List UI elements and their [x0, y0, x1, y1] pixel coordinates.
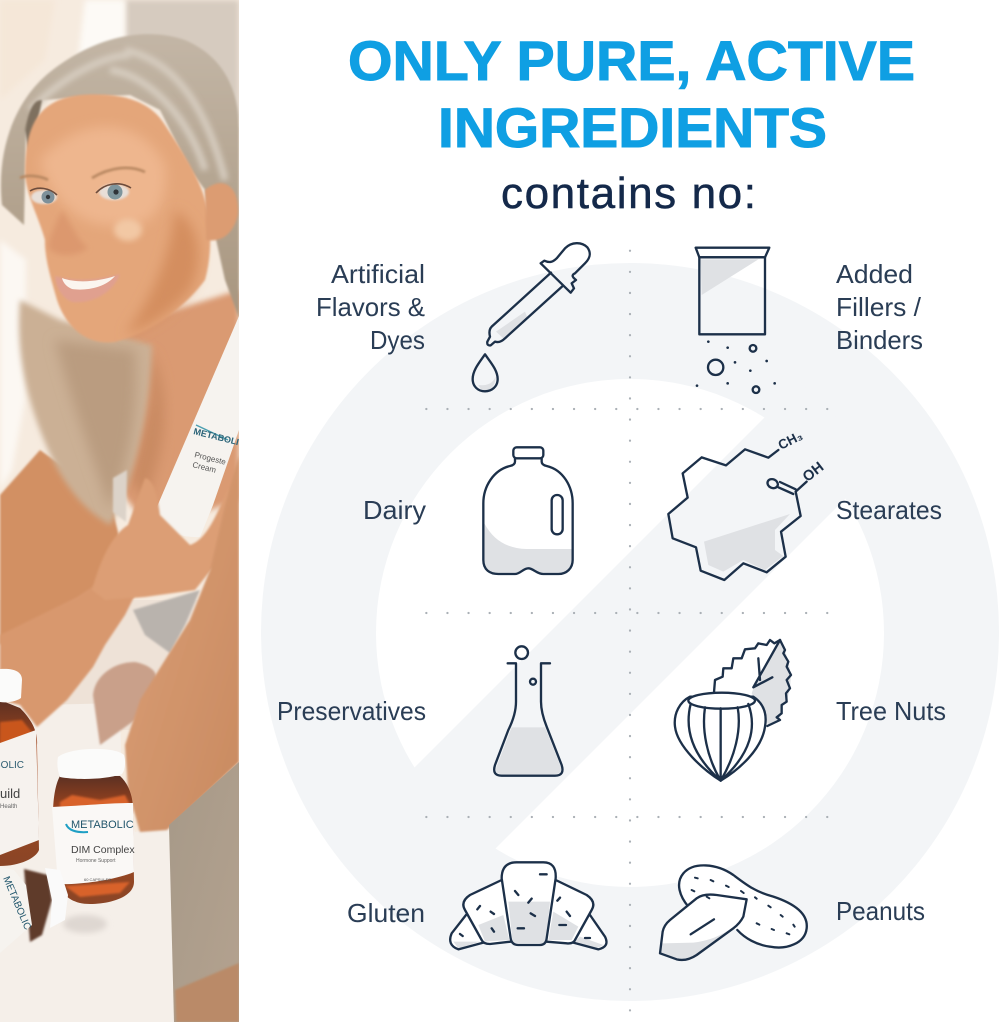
left shoulder and upper arm	[0, 450, 125, 645]
label: Artificial Flavors & Dyes: Flavors &	[316, 292, 425, 322]
label: Stearates: Stearates	[836, 495, 942, 525]
icon: hazelnut with leaf	[675, 640, 791, 781]
bottle: lying on its side: METABOLIC	[0, 875, 33, 932]
neck and chest	[110, 290, 239, 530]
icon: fillers bag with particles	[696, 248, 776, 393]
cream tube: Cream	[192, 460, 217, 475]
ear	[205, 183, 238, 240]
subtitle: contains no:	[501, 169, 756, 218]
bottle: DIM Complex: Hormone Support	[76, 858, 116, 864]
hair highlights	[30, 50, 225, 180]
lower hair	[19, 300, 152, 525]
title: ONLY PURE, ACTIVE	[348, 29, 915, 92]
smile	[55, 274, 120, 302]
label: Dairy: Dairy	[363, 495, 426, 525]
icon: dropper	[473, 243, 590, 391]
icon: stearate molecule: OH	[800, 459, 827, 485]
nose shadow	[49, 210, 88, 255]
bottle: DIM Complex	[52, 749, 135, 904]
table surface	[0, 700, 174, 1022]
grey top	[133, 590, 200, 653]
bottle: lying on its side	[0, 867, 107, 953]
cream tube	[150, 316, 247, 537]
top garment strap	[113, 470, 127, 522]
label: Peanuts: Peanuts	[836, 896, 925, 926]
cream tube: Progeste	[194, 450, 227, 467]
upper hair	[1, 34, 239, 318]
left forearm	[0, 585, 135, 727]
icon: peanuts	[660, 865, 807, 960]
label: Artificial Flavors & Dyes: Dyes	[370, 325, 425, 355]
icon: stearate molecule	[668, 428, 827, 580]
eyebrows	[20, 168, 145, 180]
bottle: DIM Complex: 60 CAPSULES	[84, 877, 111, 882]
label: Added Fillers / Binders: Fillers /	[836, 292, 922, 322]
label: Added Fillers / Binders: Added	[836, 259, 913, 289]
label: Added Fillers / Binders	[836, 264, 922, 350]
background prohibition sign	[261, 263, 999, 1001]
side block and lower arm	[169, 762, 239, 1022]
bottle: DIM Complex: DIM Complex	[71, 844, 135, 856]
face	[25, 94, 210, 342]
curtain background	[0, 0, 239, 1022]
title	[350, 40, 914, 148]
bottle: DIM Complex: METABOLIC	[71, 819, 134, 831]
label: Preservatives: Preservatives	[277, 696, 426, 726]
dotted grid	[426, 251, 838, 1022]
label: Artificial Flavors & Dyes: Artificial	[331, 259, 425, 289]
bottle: left supplement	[0, 669, 39, 866]
bent arm	[125, 455, 239, 832]
icon: flask	[494, 646, 562, 776]
label: Gluten: Gluten	[347, 898, 425, 928]
title: INGREDIENTS	[438, 96, 827, 159]
label: Artificial Flavors & Dyes	[316, 259, 425, 355]
second hand behind arm	[93, 662, 156, 745]
eyes	[30, 184, 131, 204]
label: Tree Nuts: Tree Nuts	[836, 696, 946, 726]
bottle: left supplement: Health	[0, 804, 17, 810]
label: Added Fillers / Binders: Binders	[836, 325, 923, 355]
bottle: left supplement: uild	[0, 786, 20, 801]
graphic panel: ingredients exclusion chart	[261, 40, 999, 1012]
icon: croissant	[450, 862, 606, 949]
hand holding tube	[92, 478, 229, 600]
photo panel: woman holding cream tube with supplement bottles	[0, 0, 239, 1022]
icon: milk jug	[483, 447, 573, 574]
icon: stearate molecule: CH₃	[776, 428, 805, 453]
